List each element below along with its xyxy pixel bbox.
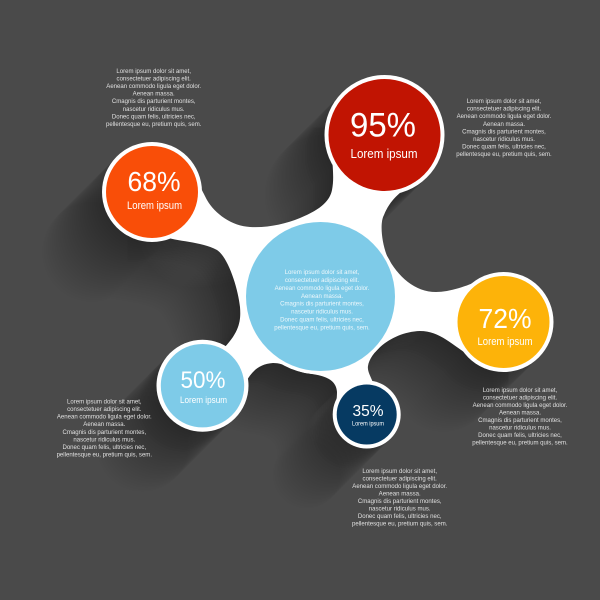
text block: lower right: Lorem ipsum dolor sit amet, xyxy=(483,388,558,394)
text block: lower left: pellentesque eu, pretium quis, sem. xyxy=(57,452,152,458)
text block: top left: Cmagnis dis parturient montes, xyxy=(112,99,196,105)
text block: top right xyxy=(456,99,552,158)
long shadow xyxy=(42,77,552,508)
text block: bottom center: Aenean massa. xyxy=(379,492,421,498)
text block: lower right: consectetuer adipiscing elit. xyxy=(483,396,557,402)
text block: bottom center: Cmagnis dis parturient montes, xyxy=(358,499,442,505)
node: 35% navy: Lorem ipsum xyxy=(352,421,384,428)
node: 95% red: 95% xyxy=(350,107,416,145)
text block: top left: Lorem ipsum dolor sit amet, xyxy=(116,69,191,75)
node: 72% yellow: Lorem ipsum xyxy=(478,336,533,348)
white metaball body xyxy=(102,75,554,448)
text block: top right: Cmagnis dis parturient montes, xyxy=(462,129,546,135)
text block: top left: Aenean massa. xyxy=(133,92,175,98)
central circle with text xyxy=(246,222,395,371)
text block: bottom center: pellentesque eu, pretium quis, sem. xyxy=(352,522,448,528)
text block: top left: nascetur ridiculus mus. xyxy=(123,107,185,113)
node: 68% orange xyxy=(106,146,198,238)
text block: lower left: Aenean massa. xyxy=(83,422,126,428)
node: 68% orange: Lorem ipsum xyxy=(127,200,182,212)
central circle with text: pellentesque eu, pretium quis, sem. xyxy=(274,326,370,332)
text block: lower right: Aenean massa. xyxy=(499,411,541,417)
central circle with text: Cmagnis dis parturient montes, xyxy=(280,302,364,308)
central circle with text: Lorem ipsum dolor sit amet, xyxy=(285,270,360,276)
text block: bottom center: consectetuer adipiscing elit. xyxy=(363,476,437,482)
text block: top right: consectetuer adipiscing elit. xyxy=(467,107,541,113)
text block: bottom center: Lorem ipsum dolor sit amet, xyxy=(362,469,437,475)
text block: lower left: nascetur ridiculus mus. xyxy=(73,437,136,443)
text block: lower left xyxy=(57,400,152,458)
text block: top left: consectetuer adipiscing elit. xyxy=(117,76,191,82)
node: 50% light blue: Lorem ipsum xyxy=(180,395,227,405)
text block: lower right: nascetur ridiculus mus. xyxy=(489,426,551,432)
node: 72% yellow: 72% xyxy=(478,303,532,334)
node: 35% navy xyxy=(337,384,397,444)
central circle with text: Aenean massa. xyxy=(301,294,343,300)
central circle with text: Donec quam felis, ultricies nec, xyxy=(280,318,364,324)
node: 95% red: Lorem ipsum xyxy=(350,146,418,161)
text block: bottom center xyxy=(352,469,448,528)
node: 35% navy: 35% xyxy=(352,403,384,420)
text block: bottom center: Aenean commodo ligula eget dolor. xyxy=(352,484,447,490)
text block: lower left: Aenean commodo ligula eget dolor. xyxy=(57,415,152,421)
text block: top right: nascetur ridiculus mus. xyxy=(473,137,535,143)
text block: lower right xyxy=(472,388,568,447)
text block: lower right: Donec quam felis, ultricies nec, xyxy=(478,433,562,439)
text block: lower left: Cmagnis dis parturient montes, xyxy=(62,430,146,436)
text block: lower right: Aenean commodo ligula eget dolor. xyxy=(473,403,568,409)
central circle with text: Aenean commodo ligula eget dolor. xyxy=(275,286,370,292)
text block: lower left: consectetuer adipiscing elit. xyxy=(67,407,142,413)
node: 50% light blue xyxy=(161,344,244,427)
text block: lower right: pellentesque eu, pretium quis, sem. xyxy=(472,441,568,447)
text block: top right: Lorem ipsum dolor sit amet, xyxy=(467,99,542,105)
text block: top left xyxy=(106,69,202,128)
text block: lower right: Cmagnis dis parturient montes, xyxy=(478,418,562,424)
text block: bottom center: Donec quam felis, ultricies nec, xyxy=(358,514,442,520)
node: 72% yellow xyxy=(458,276,550,368)
text block: lower left: Donec quam felis, ultricies nec, xyxy=(62,445,146,451)
node: 68% orange: 68% xyxy=(128,166,180,197)
text block: lower left: Lorem ipsum dolor sit amet, xyxy=(67,400,142,406)
node: 50% light blue: 50% xyxy=(180,367,226,394)
text block: top left: Aenean commodo ligula eget dolor. xyxy=(106,84,201,90)
central circle with text: nascetur ridiculus mus. xyxy=(291,310,353,316)
text block: top right: Donec quam felis, ultricies nec, xyxy=(462,144,546,150)
text block: top left: pellentesque eu, pretium quis, sem. xyxy=(106,122,202,128)
text block: top right: Aenean commodo ligula eget dolor. xyxy=(457,114,552,120)
text block: bottom center: nascetur ridiculus mus. xyxy=(369,507,431,513)
text block: top right: pellentesque eu, pretium quis, sem. xyxy=(456,152,552,158)
central circle with text: consectetuer adipiscing elit. xyxy=(285,278,359,284)
text block: top left: Donec quam felis, ultricies nec, xyxy=(112,114,196,120)
node: 95% red xyxy=(328,79,440,191)
text block: top right: Aenean massa. xyxy=(483,122,525,128)
